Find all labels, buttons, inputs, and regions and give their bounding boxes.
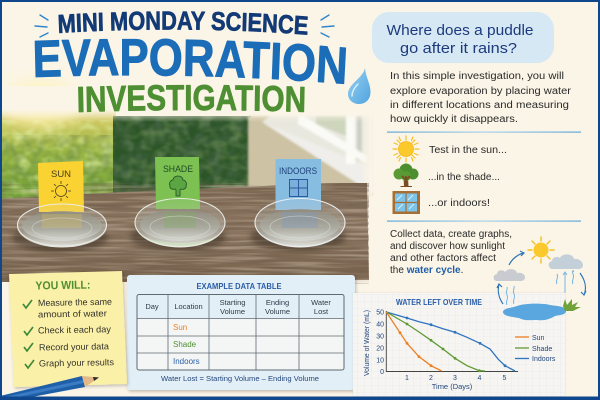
- label card: shade: [155, 157, 200, 209]
- y axis labels: 20: [376, 346, 384, 352]
- photo background: indoor window sill: [248, 116, 372, 196]
- title line: evaporation: EVAPORATION: [34, 38, 346, 84]
- checklist: Check it each day: [38, 324, 112, 335]
- data table grid: Location: [174, 302, 203, 311]
- water cycle: arrow to cloud: [497, 284, 503, 304]
- chart legend: [515, 335, 556, 363]
- text: test in the sun: Test in the sun...: [429, 144, 507, 156]
- water cycle: arrow to sun: [509, 251, 524, 265]
- icon: window: [392, 191, 420, 214]
- intro paragraph: In this simple investigation, you will: [390, 71, 564, 82]
- x axis title: Time (Days): [432, 382, 473, 391]
- data table grid: Starting: [220, 298, 245, 307]
- icon: pencil: [0, 376, 99, 400]
- dish: indoors: [250, 198, 346, 251]
- photo right fade: [360, 112, 372, 282]
- data table grid: [137, 294, 344, 370]
- wooden table: [2, 183, 369, 284]
- label card: indoors: INDOORS: [279, 166, 317, 177]
- water cycle diagram: [494, 237, 586, 320]
- question bubble: go after it rains?: [400, 40, 517, 57]
- sticky note heading: YOU WILL:: [35, 280, 91, 292]
- intro paragraph: in different locations and measuring: [390, 100, 569, 111]
- panel: line chart water left over time: [353, 293, 565, 396]
- panel: example data table: [127, 275, 355, 390]
- label card: shade: SHADE: [163, 164, 193, 175]
- label card: sun: [38, 161, 84, 212]
- title block: [34, 11, 346, 112]
- intro paragraph: [390, 71, 572, 125]
- dish: sun: [12, 204, 108, 252]
- line: sun: [386, 312, 442, 371]
- chart legend: Shade: [532, 346, 552, 353]
- x axis labels: 4: [478, 375, 482, 382]
- x axis labels: 5: [503, 375, 507, 382]
- table formula: Water Lost = Starting Volume – Ending Volume: [161, 374, 319, 383]
- photo background: shaded hedge: [113, 116, 251, 201]
- y axis labels: 0: [380, 369, 384, 376]
- axes: [386, 311, 518, 372]
- data table grid: Day: [145, 302, 159, 311]
- line: shade: [386, 312, 485, 372]
- checklist: Graph your results: [39, 357, 115, 368]
- photo top fade: [0, 86, 372, 122]
- closing paragraph: the water cycle.: [390, 265, 463, 276]
- checklist: Record your data: [39, 341, 109, 352]
- data table grid: Shade: [173, 340, 197, 349]
- photo: three dishes on a wooden table: [0, 83, 372, 284]
- data table grid: Water: [311, 298, 331, 307]
- data table grid: Lost: [314, 307, 329, 316]
- y axis labels: 30: [376, 334, 384, 340]
- title line: mini monday science: MINI MONDAY SCIENCE: [58, 11, 308, 35]
- water cycle: vapor lines: [506, 271, 574, 305]
- x axis labels: 3: [453, 375, 457, 382]
- water cycle: rain arrow: [580, 273, 586, 295]
- y axis labels: 40: [376, 322, 384, 328]
- icon: water drop: [348, 68, 370, 104]
- panel: you will sticky note: [9, 271, 127, 387]
- x axis labels: [405, 375, 507, 382]
- icon: tree: [394, 164, 418, 187]
- photo background: sunny grass: [0, 83, 116, 206]
- question bubble: Where does a puddle: [386, 22, 534, 39]
- intro paragraph: explore evaporation by placing water: [390, 86, 572, 97]
- chart title: WATER LEFT OVER TIME: [396, 297, 482, 307]
- dish: shade: [130, 198, 226, 251]
- x axis labels: 1: [405, 375, 409, 382]
- water cycle: grass: [563, 299, 581, 311]
- data table grid: Indoors: [173, 357, 200, 366]
- closing paragraph: Collect data, create graphs,: [390, 229, 512, 240]
- y axis labels: 10: [376, 358, 384, 364]
- closing paragraph: and other factors affect: [390, 253, 496, 264]
- intro paragraph: how quickly it disappears.: [390, 114, 518, 125]
- data table grid: Sun: [173, 323, 187, 332]
- question bubble: [372, 12, 554, 63]
- data table grid: Volume: [220, 307, 245, 316]
- y axis labels: [376, 310, 384, 376]
- line: indoors: [386, 312, 515, 371]
- icon: sun: [393, 136, 419, 162]
- title accent: right burst: [321, 15, 334, 37]
- water cycle: sun: [528, 237, 554, 263]
- title accent: left burst: [35, 15, 48, 37]
- checklist: amount of water: [38, 308, 107, 319]
- water cycle: puddle: [503, 304, 566, 320]
- label card: sun: SUN: [51, 169, 71, 180]
- text: in the shade: ...in the shade...: [428, 171, 500, 183]
- closing paragraph: [390, 229, 512, 276]
- location list: [392, 136, 507, 214]
- chart legend: Indoors: [532, 356, 556, 363]
- chart legend: Sun: [532, 335, 545, 342]
- checklist: Measure the same: [38, 297, 112, 308]
- data table grid: Ending: [266, 298, 289, 307]
- lower page strip: [2, 282, 354, 397]
- table heading: EXAMPLE DATA TABLE: [196, 281, 282, 291]
- title line: investigation: INVESTIGATION: [78, 84, 305, 112]
- water cycle: left cloud: [494, 269, 525, 281]
- text: or indoors: ...or indoors!: [428, 197, 490, 209]
- checklist: [23, 297, 115, 368]
- y axis labels: 50: [376, 310, 384, 316]
- water cycle: right cloud: [549, 254, 583, 269]
- label card: indoors: [276, 159, 321, 210]
- x axis labels: 2: [429, 375, 433, 382]
- data table grid: Volume: [265, 307, 290, 316]
- y axis title: Volume of Water (mL): [364, 310, 371, 376]
- closing paragraph: and discover how sunlight: [390, 241, 505, 252]
